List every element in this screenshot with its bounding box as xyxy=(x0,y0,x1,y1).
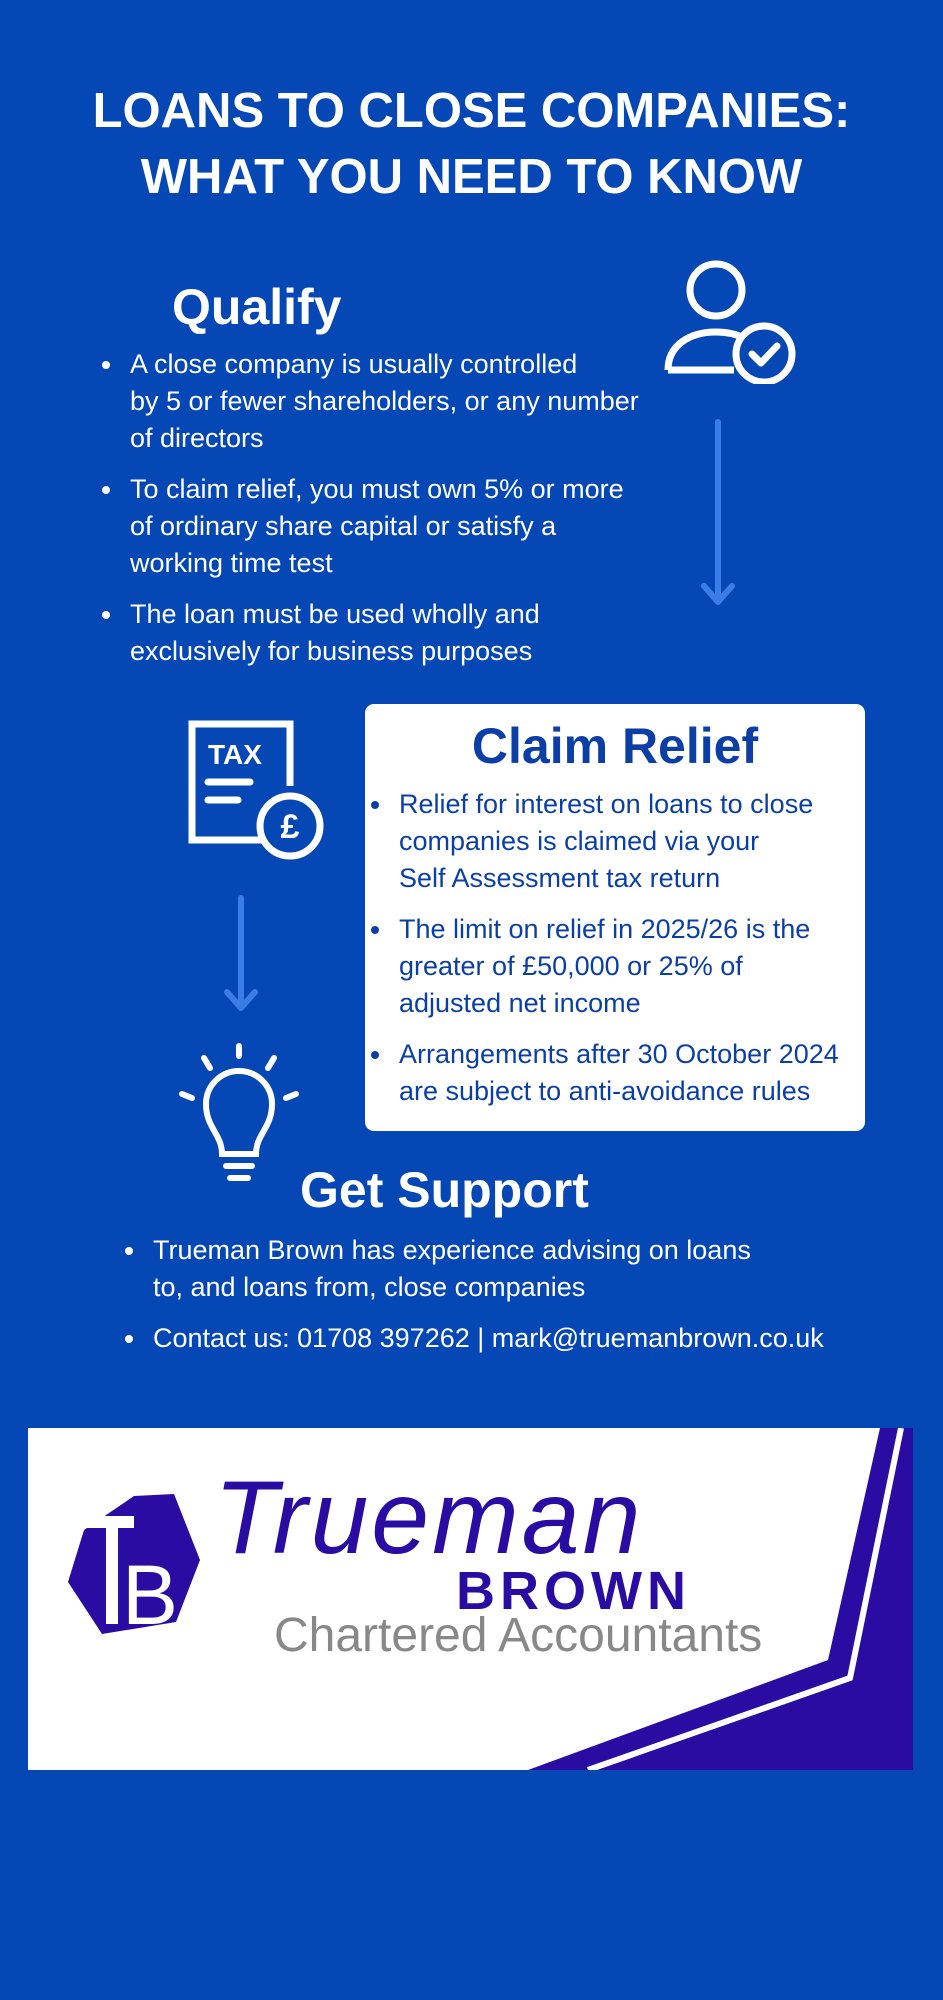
logo panel xyxy=(28,1428,913,1770)
bullets: claim relief: greater of £50,000 or 25% of xyxy=(399,951,743,981)
title xyxy=(93,84,850,204)
icon: tax document: £ xyxy=(281,808,300,846)
heading: Qualify: Qualify xyxy=(172,279,341,335)
bullets: get support: to, and loans from, close companies xyxy=(153,1272,585,1302)
icon: tax document xyxy=(188,720,324,860)
bullets: qualify: exclusively for business purposes xyxy=(130,636,532,666)
title: LOANS TO CLOSE COMPANIES: xyxy=(93,84,850,138)
logo mark: TB hexagon xyxy=(68,1494,200,1636)
bullets: claim relief: The limit on relief in 2025/26 is the xyxy=(399,914,810,944)
arrow: left down xyxy=(224,895,258,1011)
bullets: get support: Trueman Brown has experience advising on loans xyxy=(153,1235,751,1265)
bullets: qualify: of ordinary share capital or satisfy a xyxy=(130,511,556,541)
logo text: Trueman: Trueman xyxy=(214,1460,643,1576)
icon: light bulb xyxy=(179,1043,299,1181)
bullets: qualify: The loan must be used wholly and xyxy=(130,599,540,629)
bullets: qualify: by 5 or fewer shareholders, or any number xyxy=(130,386,639,416)
icon: person with check xyxy=(664,260,796,384)
arrow: right down xyxy=(701,419,735,605)
bullets: qualify: To claim relief, you must own 5% or more xyxy=(130,474,624,504)
bullets: qualify xyxy=(102,349,639,666)
icon: tax document: TAX xyxy=(208,739,262,770)
bullets: claim relief: adjusted net income xyxy=(399,988,641,1018)
bullets: claim relief: are subject to anti-avoidance rules xyxy=(399,1076,810,1106)
bullets: get support xyxy=(125,1235,824,1353)
bullets: get support: Contact us: 01708 397262 | mark@truemanbrown.co.uk xyxy=(153,1323,824,1353)
panel: claim relief xyxy=(365,704,865,1131)
bullets: claim relief: Relief for interest on loans to close xyxy=(399,789,813,819)
title: WHAT YOU NEED TO KNOW xyxy=(141,150,802,204)
heading: Claim Relief: Claim Relief xyxy=(472,718,758,774)
logo text: BROWN: BROWN xyxy=(456,1561,691,1621)
logo stripes xyxy=(528,1428,913,1770)
bullets: qualify: of directors xyxy=(130,423,264,453)
logo text: Chartered Accountants: Chartered Accountants xyxy=(274,1609,762,1662)
bullets: qualify: working time test xyxy=(130,548,333,578)
bullets: claim relief: Arrangements after 30 October 2024 xyxy=(399,1039,839,1069)
bullets: claim relief xyxy=(371,789,839,1106)
heading: Get Support: Get Support xyxy=(300,1162,589,1218)
bullets: claim relief: Self Assessment tax return xyxy=(399,863,720,893)
bullets: qualify: A close company is usually controlled xyxy=(130,349,577,379)
bullets: claim relief: companies is claimed via your xyxy=(399,826,759,856)
